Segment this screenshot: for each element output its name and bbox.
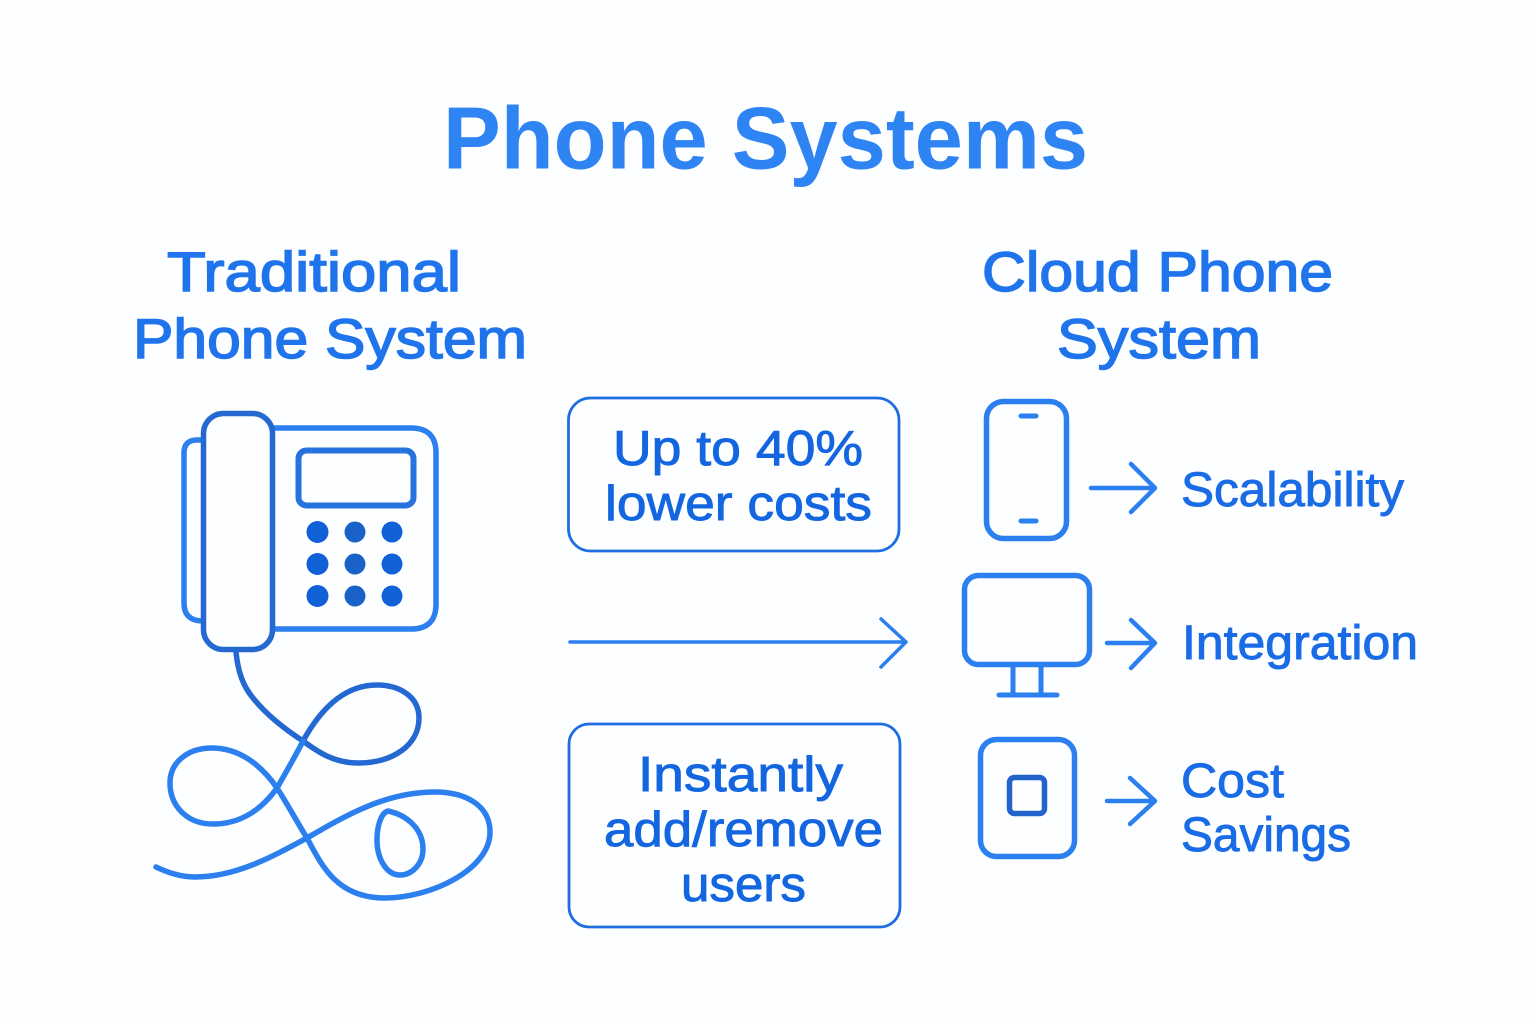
callout: add and remove users: users [681, 858, 806, 912]
tangled cord [156, 652, 490, 898]
heading: cloud phone system [982, 240, 1333, 370]
callout: lower costs [568, 398, 899, 551]
callout: add and remove users [569, 724, 900, 927]
callout: add and remove users: Instantly [638, 748, 844, 802]
callout: lower costs: lower costs [605, 477, 872, 531]
phone body [272, 428, 436, 629]
icon: cost savings square [980, 740, 1074, 856]
heading: cloud phone system: Cloud Phone [982, 240, 1333, 303]
icon: desk phone [156, 414, 490, 898]
icon: smartphone [986, 402, 1066, 538]
display [298, 450, 414, 506]
icon: monitor [964, 576, 1090, 695]
label: integration: Integration [1182, 617, 1418, 670]
arrow: integration [1107, 620, 1155, 668]
label: cost savings: Savings [1181, 809, 1351, 862]
small cord loop [377, 811, 423, 875]
heading: cloud phone system: System [1057, 307, 1261, 370]
heading: traditional phone system [133, 240, 527, 370]
label: cost savings: Cost [1181, 755, 1284, 808]
handset [204, 414, 272, 650]
callout: lower costs: Up to 40% [613, 422, 863, 476]
arrow: scalability [1091, 464, 1155, 512]
arrow: traditional to cloud [570, 619, 906, 667]
keypad [306, 521, 402, 607]
heading: traditional phone system: Phone System [133, 307, 527, 370]
label: scalability: Scalability [1181, 464, 1404, 517]
callout: add and remove users: add/remove [604, 803, 883, 857]
title: Phone Systems [443, 88, 1088, 188]
heading: traditional phone system: Traditional [167, 240, 461, 303]
phone cradle back [184, 440, 203, 621]
arrow: cost savings [1107, 778, 1155, 824]
label: cost savings [1181, 755, 1351, 862]
